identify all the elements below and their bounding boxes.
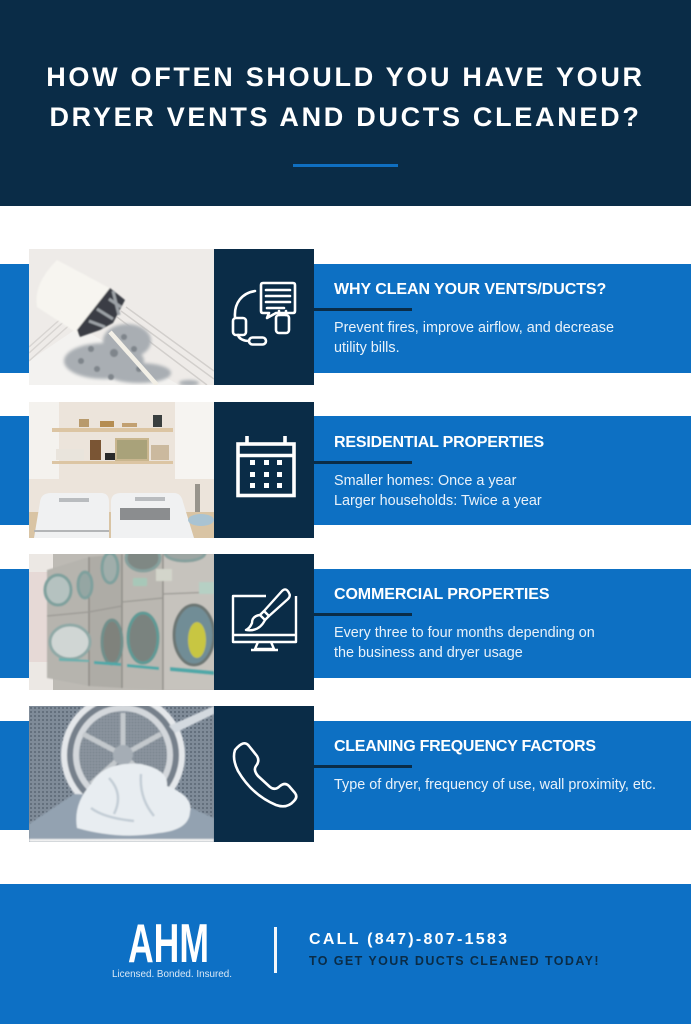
body text: Type of dryer, frequency of use, wall proximity, etc. — [334, 777, 656, 793]
blue band — [0, 721, 691, 830]
title line two: DRYER VENTS AND DUCTS CLEANED? — [49, 102, 642, 132]
icon: telephone handset — [232, 742, 298, 808]
body text: Prevent fires, improve airflow, and decrease — [334, 320, 614, 336]
call to action phone: CALL (847)-807-1583 — [309, 931, 509, 948]
heading rule — [314, 765, 412, 768]
shelves — [52, 428, 173, 432]
body text — [334, 625, 595, 661]
body text — [334, 320, 614, 356]
panel: residential — [0, 402, 691, 538]
heading rule — [314, 613, 412, 616]
blue band — [0, 264, 691, 373]
navy icon block — [214, 554, 314, 690]
panel: why clean — [0, 249, 691, 385]
washers — [34, 493, 109, 538]
body text: Smaller homes: Once a year — [334, 473, 516, 489]
body text: the business and dryer usage — [334, 645, 523, 661]
heading: CLEANING FREQUENCY FACTORS — [334, 738, 596, 755]
photo: dryer drum with towels — [29, 706, 214, 842]
body text: utility bills. — [334, 340, 400, 356]
navy icon block — [214, 249, 314, 385]
navy icon block — [214, 402, 314, 538]
photo: lint-filled duct — [29, 249, 214, 385]
heading: WHY CLEAN YOUR VENTS/DUCTS? — [334, 281, 606, 298]
header panel — [0, 0, 691, 206]
icon: monitor with paintbrush — [232, 588, 298, 652]
navy icon block — [214, 706, 314, 842]
panel: commercial — [0, 554, 691, 690]
logo — [112, 918, 232, 980]
icon: headset with chat bubble — [232, 282, 296, 346]
footer panel — [0, 884, 691, 1024]
body text: Every three to four months depending on — [334, 625, 595, 641]
title line one: HOW OFTEN SHOULD YOU HAVE YOUR — [46, 62, 645, 92]
call to action line: TO GET YOUR DUCTS CLEANED TODAY! — [309, 954, 600, 968]
icon: calendar — [236, 436, 296, 498]
photo: laundry room — [29, 402, 214, 538]
divider — [274, 927, 276, 973]
title underline — [293, 164, 398, 167]
heading rule — [314, 461, 412, 464]
heading: RESIDENTIAL PROPERTIES — [334, 434, 544, 451]
heading rule — [314, 308, 412, 311]
blue band — [0, 416, 691, 525]
heading: COMMERCIAL PROPERTIES — [334, 586, 549, 603]
blue band — [0, 569, 691, 678]
body text: Larger households: Twice a year — [334, 493, 542, 509]
body text — [334, 473, 542, 509]
panel: frequency factors — [0, 706, 691, 842]
photo: laundromat machines — [29, 554, 214, 690]
